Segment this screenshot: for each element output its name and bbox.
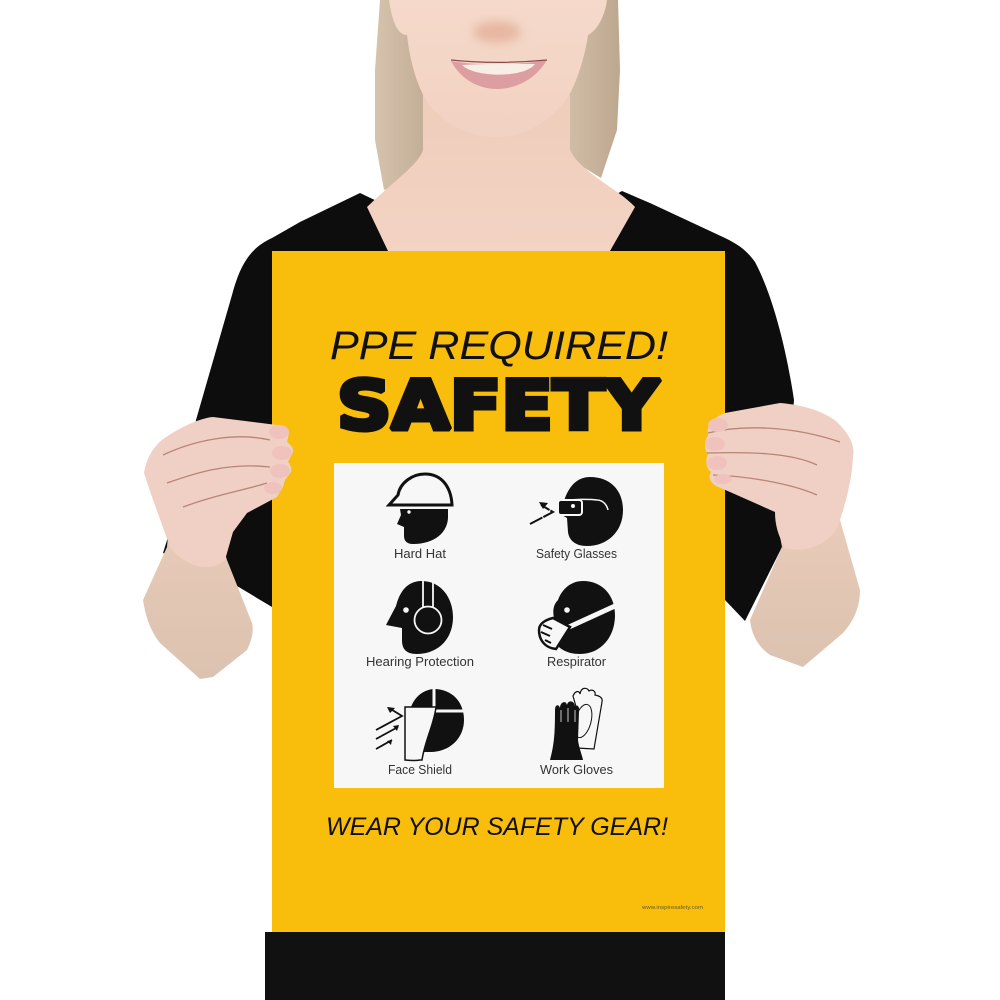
- label: work gloves: Work Gloves: [540, 763, 613, 777]
- icon: work gloves: [550, 688, 602, 760]
- person: face: [389, 0, 607, 137]
- person: black shirt: [163, 191, 794, 1000]
- left hand and forearm: [143, 417, 293, 679]
- label: hard hat: Hard Hat: [394, 547, 447, 561]
- right hand and forearm: [705, 403, 860, 667]
- icon: respirator: [539, 581, 615, 654]
- label: face shield: Face Shield: [388, 763, 452, 777]
- label: safety glasses: Safety Glasses: [536, 547, 617, 561]
- label: hearing protection: Hearing Protection: [366, 655, 474, 669]
- footer slogan: WEAR YOUR SAFETY GEAR!: [326, 813, 668, 841]
- person: neck and chest: [367, 95, 635, 251]
- label: respirator: Respirator: [547, 655, 606, 669]
- panel: white PPE chart: [334, 463, 664, 788]
- icon: face shield: [376, 688, 465, 760]
- website credit: www.inspiresafety.com: [641, 905, 703, 911]
- heading: PPE required: PPE REQUIRED!: [330, 324, 668, 368]
- icon: safety glasses: [530, 477, 623, 546]
- person: hair: [375, 0, 620, 190]
- person: smile: [451, 60, 547, 89]
- icon: hearing protection: [386, 580, 453, 654]
- panel: yellow poster: [272, 251, 725, 932]
- icon: hard hat: [389, 474, 452, 544]
- title: SAFETY: SAFETY: [337, 367, 660, 446]
